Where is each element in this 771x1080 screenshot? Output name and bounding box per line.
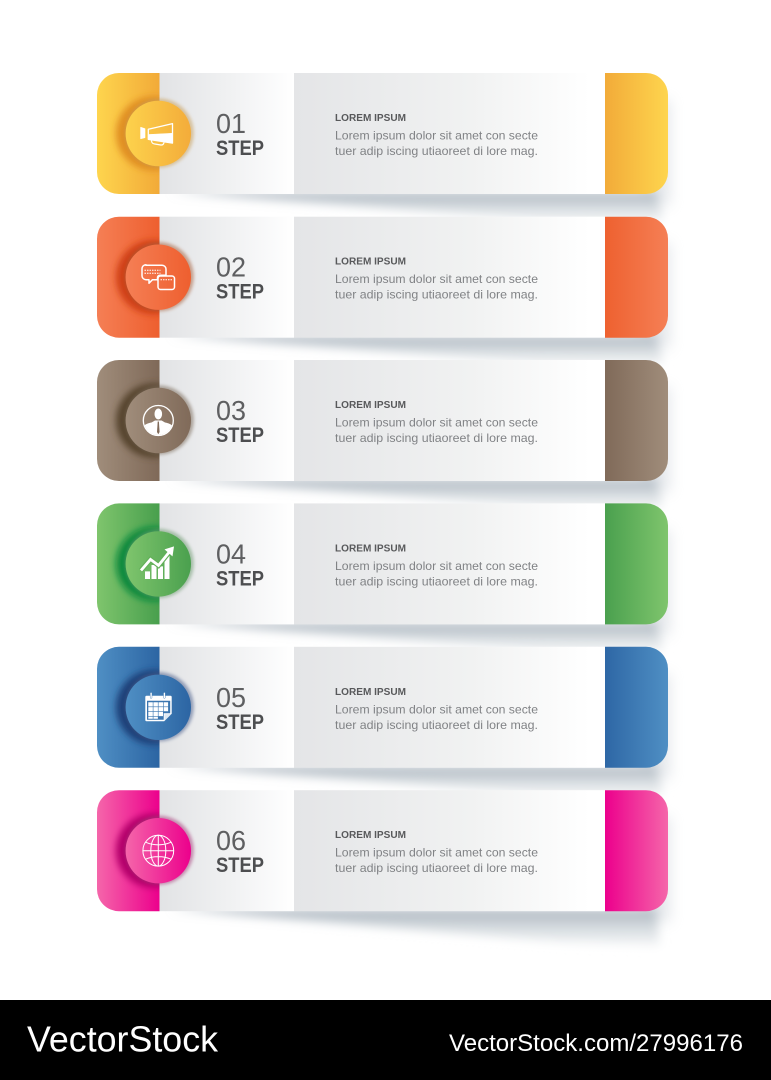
card shadows xyxy=(170,100,670,946)
body text xyxy=(335,559,538,588)
circle halo on panel xyxy=(125,98,194,168)
body text xyxy=(335,846,538,875)
body text: tuer adip iscing utiaoreet di lore mag. xyxy=(335,288,538,302)
body text: Lorem ipsum dolor sit amet con secte xyxy=(335,128,538,142)
icon: globe xyxy=(143,835,174,866)
circle halo on tab xyxy=(112,810,160,891)
text background xyxy=(294,647,605,768)
left colour tab xyxy=(97,217,160,338)
left colour tab xyxy=(97,360,160,481)
shadow: row 3 xyxy=(170,387,670,509)
heading: LOREM IPSUM xyxy=(335,112,406,124)
footer bar xyxy=(0,1000,771,1080)
circle halo on panel xyxy=(125,529,194,598)
body text xyxy=(335,128,538,158)
circle halo on tab xyxy=(112,237,160,318)
shadow: row 5 xyxy=(170,674,670,796)
heading: LOREM IPSUM xyxy=(335,829,406,841)
body text xyxy=(335,272,538,302)
icon: chat bubbles xyxy=(142,265,174,290)
panel: step 03 xyxy=(97,360,668,481)
step label: STEP xyxy=(216,567,264,590)
heading: LOREM IPSUM xyxy=(335,399,406,411)
step background xyxy=(160,360,294,481)
circle halo on tab xyxy=(112,94,160,172)
panel: step 02 xyxy=(97,217,668,338)
step label: STEP xyxy=(216,281,264,304)
body text xyxy=(335,702,538,732)
icon: megaphone xyxy=(141,124,172,145)
footer brand: VectorStock xyxy=(27,1018,219,1060)
text background xyxy=(294,503,605,624)
body text: Lorem ipsum dolor sit amet con secte xyxy=(335,416,538,430)
step number: 04 xyxy=(216,538,246,569)
step number: 01 xyxy=(216,108,246,139)
circle badge xyxy=(126,818,191,883)
body text: tuer adip iscing utiaoreet di lore mag. xyxy=(335,574,538,588)
step label: STEP xyxy=(216,854,264,877)
step number: 05 xyxy=(216,682,246,713)
right colour tab xyxy=(605,217,668,338)
left colour tab xyxy=(97,503,160,624)
left colour tab xyxy=(97,790,160,911)
step number: 06 xyxy=(216,825,246,856)
circle badge xyxy=(126,244,191,310)
panel: step 01 xyxy=(97,73,668,194)
text background xyxy=(294,360,605,481)
right colour tab xyxy=(605,647,668,768)
shadow: row 4 xyxy=(170,530,670,652)
body text: tuer adip iscing utiaoreet di lore mag. xyxy=(335,861,538,875)
circle badge xyxy=(126,101,191,166)
shadow: row 1 xyxy=(170,100,670,222)
heading: LOREM IPSUM xyxy=(335,256,406,268)
step background xyxy=(160,647,294,768)
step number: 02 xyxy=(216,252,246,283)
shadow: row 2 xyxy=(170,243,670,365)
body text: Lorem ipsum dolor sit amet con secte xyxy=(335,559,538,573)
left colour tab xyxy=(97,647,160,768)
body text: tuer adip iscing utiaoreet di lore mag. xyxy=(335,431,538,445)
icon: growth chart xyxy=(141,546,174,579)
body text: tuer adip iscing utiaoreet di lore mag. xyxy=(335,718,538,732)
left colour tab xyxy=(97,73,160,194)
text background xyxy=(294,217,605,338)
step background xyxy=(160,73,294,194)
step label: STEP xyxy=(216,424,264,447)
right colour tab xyxy=(605,503,668,624)
footer image id: VectorStock.com/27996176 xyxy=(449,1030,743,1057)
panel: step 04 xyxy=(97,503,668,624)
body text: tuer adip iscing utiaoreet di lore mag. xyxy=(335,144,538,158)
circle halo on tab xyxy=(112,380,160,460)
circle halo on tab xyxy=(112,668,160,748)
shadow: row 6 xyxy=(170,817,670,946)
heading: LOREM IPSUM xyxy=(335,542,406,554)
step background xyxy=(160,790,294,911)
right colour tab xyxy=(605,790,668,911)
text background xyxy=(294,73,605,194)
circle halo on panel xyxy=(125,386,194,454)
circle halo on panel xyxy=(125,816,194,885)
body text: Lorem ipsum dolor sit amet con secte xyxy=(335,272,538,286)
step background xyxy=(160,217,294,338)
step background xyxy=(160,503,294,624)
circle halo on tab xyxy=(112,523,160,605)
panel: step 05 xyxy=(97,647,668,768)
circle badge xyxy=(126,531,191,597)
step label: STEP xyxy=(216,137,264,160)
heading: LOREM IPSUM xyxy=(335,686,406,698)
circle badge xyxy=(126,675,191,740)
body text: Lorem ipsum dolor sit amet con secte xyxy=(335,846,538,860)
right colour tab xyxy=(605,360,668,481)
step label: STEP xyxy=(216,711,264,734)
circle halo on panel xyxy=(125,672,194,741)
body text: Lorem ipsum dolor sit amet con secte xyxy=(335,702,538,716)
step number: 03 xyxy=(216,395,246,426)
circle halo on panel xyxy=(125,242,194,311)
body text xyxy=(335,416,538,445)
panel: step 06 xyxy=(97,790,668,911)
icon: businessman xyxy=(143,406,174,438)
icon: calendar xyxy=(145,692,172,721)
right colour tab xyxy=(605,73,668,194)
circle badge xyxy=(126,388,191,453)
text background xyxy=(294,790,605,911)
